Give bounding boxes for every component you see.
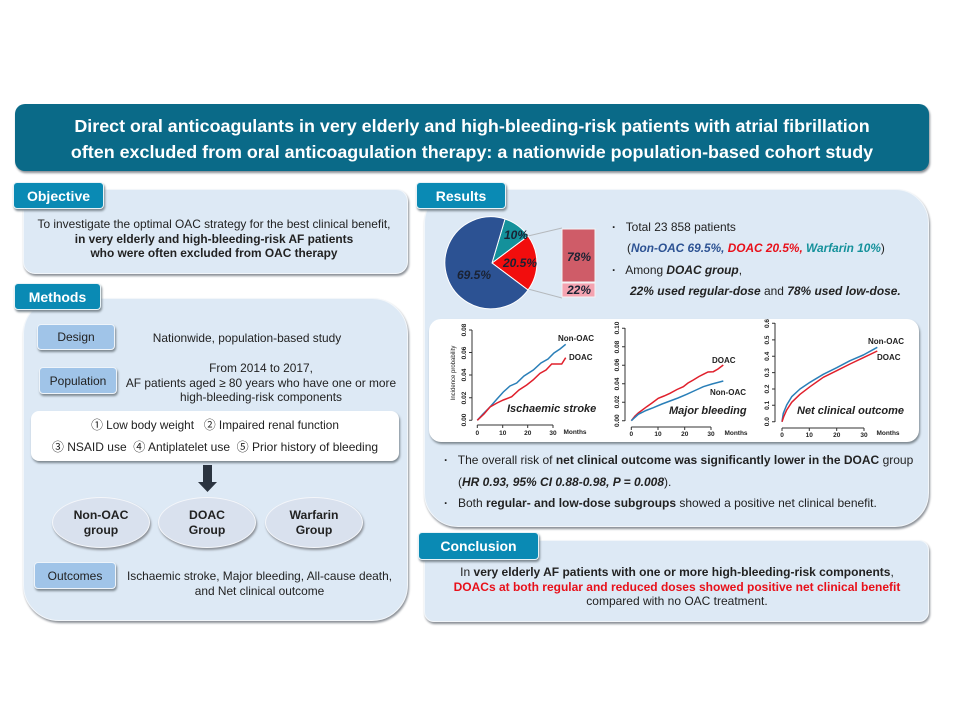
group: warfarin: Group [296, 522, 332, 536]
conclusion text: In very elderly AF patients with one or more high-bleeding-risk components, [460, 565, 894, 579]
chart: net clinical outcome: 10 [806, 432, 813, 439]
chart: net clinical outcome: Net clinical outcome [797, 405, 904, 417]
chart: ischaemic stroke: Months [563, 429, 587, 436]
patient shares: (Non-OAC 69.5%, DOAC 20.5%, Warfarin 10%) [627, 241, 885, 255]
chart: major bleeding [614, 321, 748, 438]
heading: methods: Methods [29, 288, 86, 304]
label: population: Population [50, 374, 106, 388]
bullet: subgroups: · Both regular- and low-dose subgroups showed a positive net clinical benefit. [444, 496, 877, 510]
chart: ischaemic stroke: Non-OAC [558, 334, 594, 343]
group: non-OAC [52, 497, 150, 548]
results summary text [612, 220, 901, 298]
title banner: often excluded from oral anticoagulation therapy: a nationwide population-based cohort study [71, 142, 873, 162]
objective text: To investigate the optimal OAC strategy for the best clinical benefit, [38, 217, 390, 231]
objective text: in very elderly and high-bleeding-risk AF patients [75, 232, 353, 246]
population text: From 2014 to 2017, [209, 361, 313, 375]
panel: objective [23, 189, 408, 274]
chart: ischaemic stroke: 0.08 [461, 323, 468, 336]
chart: major bleeding: DOAC [712, 356, 736, 365]
chart: net clinical outcome: 20 [833, 432, 841, 439]
population text: AF patients aged ≥ 80 years who have one or more [126, 376, 396, 390]
chart: major bleeding: Months [724, 430, 748, 437]
outcomes text [127, 569, 392, 598]
bullet: DOAC group: · Among DOAC group, [612, 263, 742, 277]
chart: net clinical outcome: 0.5 [764, 335, 771, 345]
label: design [37, 324, 115, 350]
chart: major bleeding: 0.10 [614, 321, 621, 334]
group: warfarin: Warfarin [290, 508, 338, 522]
chart panel [429, 319, 919, 442]
chart: ischaemic stroke: 0.00 [461, 413, 468, 426]
chart: major bleeding: 0.06 [614, 358, 621, 371]
label: outcomes: Outcomes [48, 568, 102, 582]
chart: ischaemic stroke: 30 [549, 430, 557, 437]
components row 2: ③ NSAID use ④ Antiplatelet use ⑤ Prior history of bleeding [52, 440, 378, 454]
chart: major bleeding: Non-OAC [710, 388, 746, 397]
outcomes text: and Net clinical outcome [195, 584, 324, 598]
chart: ischaemic stroke: 10 [499, 430, 507, 437]
group: DOAC: Group [189, 522, 225, 536]
chart: ischaemic stroke: Incidence probability [451, 346, 457, 400]
outcomes text: Ischaemic stroke, Major bleeding, All-cause death, [127, 569, 392, 583]
chart: major bleeding: 0 [629, 431, 633, 438]
bullet: net clinical outcome: · The overall risk of net clinical outcome was significantly lower in the DOAC group [444, 453, 913, 467]
chart: net clinical outcome: 30 [860, 432, 868, 439]
pie chart with DOAC breakdown: 20.5% [502, 256, 537, 270]
design text: Nationwide, population-based study [153, 331, 341, 345]
chart: ischaemic stroke: Ischaemic stroke [507, 403, 596, 415]
heading: objective [13, 182, 104, 209]
bullet: total: · Total 23 858 patients [612, 220, 736, 234]
group: non-OAC: group [84, 522, 118, 536]
conclusion text: DOACs at both regular and reduced doses showed positive net clinical benefit [454, 580, 900, 594]
results findings text [444, 453, 913, 510]
chart: net clinical outcome: 0.0 [764, 417, 771, 426]
objective text [38, 217, 390, 260]
chart: ischaemic stroke: 0 [475, 430, 479, 437]
group: DOAC: DOAC [189, 508, 225, 522]
chart: major bleeding: 20 [681, 431, 689, 438]
label: outcomes [34, 562, 116, 589]
chart: net clinical outcome: 0.6 [764, 319, 771, 328]
chart: net clinical outcome: 0.1 [764, 400, 771, 410]
chart: ischaemic stroke: 0.02 [461, 391, 468, 404]
group: DOAC [158, 497, 256, 548]
chart: net clinical outcome: 0.2 [764, 384, 771, 394]
chart: major bleeding: 0.08 [614, 340, 621, 353]
chart: ischaemic stroke: DOAC [569, 353, 593, 362]
dose split: 22% used regular-dose and 78% used low-dose. [630, 284, 901, 298]
heading: conclusion: Conclusion [440, 538, 517, 554]
panel: conclusion [424, 540, 929, 622]
high-bleeding-risk components box [31, 411, 399, 461]
conclusion text: compared with no OAC treatment. [586, 594, 768, 608]
chart: ischaemic stroke: 0.06 [461, 346, 468, 359]
heading: objective: Objective [27, 188, 90, 204]
chart: major bleeding: 0.04 [614, 377, 621, 390]
chart: net clinical outcome: 0.4 [764, 351, 771, 361]
title banner [15, 104, 929, 171]
label: design: Design [57, 330, 95, 344]
pie chart with DOAC breakdown: 78% [567, 250, 591, 264]
hazard ratio: (HR 0.93, 95% CI 0.88-0.98, P = 0.008). [458, 475, 671, 489]
group: non-OAC: Non-OAC [74, 508, 128, 522]
chart: major bleeding: 30 [707, 431, 715, 438]
conclusion text [454, 565, 900, 608]
objective text: who were often excluded from OAC therapy [90, 246, 338, 260]
chart: major bleeding: Major bleeding [669, 405, 747, 417]
chart: net clinical outcome: 0.3 [764, 368, 771, 377]
panel: methods [23, 298, 408, 621]
heading: results: Results [436, 188, 486, 204]
title banner: Direct oral anticoagulants in very elderly and high-bleeding-risk patients with atrial fibrillation [74, 116, 870, 136]
chart: major bleeding: 10 [654, 431, 662, 438]
components row 1: ① Low body weight ② Impaired renal function [91, 418, 339, 432]
pie chart with DOAC breakdown: 69.5% [457, 268, 491, 282]
chart: net clinical outcome: 0 [780, 432, 784, 439]
heading: methods [14, 283, 101, 310]
panel: results [424, 189, 929, 527]
population text: high-bleeding-risk components [180, 390, 342, 404]
chart: net clinical outcome: DOAC [877, 353, 901, 362]
pie chart with DOAC breakdown: 22% [566, 283, 591, 297]
label: population [39, 367, 117, 394]
chart: ischaemic stroke: 0.04 [461, 368, 468, 381]
pie chart with DOAC breakdown: 10% [504, 228, 528, 242]
chart: major bleeding: 0.02 [614, 395, 621, 408]
chart: major bleeding: 0.00 [614, 414, 621, 427]
heading: conclusion [418, 532, 539, 560]
chart: net clinical outcome [764, 319, 904, 439]
chart: ischaemic stroke: 20 [524, 430, 532, 437]
heading: results [416, 182, 506, 209]
chart: ischaemic stroke [451, 323, 596, 437]
population text [126, 361, 396, 404]
chart: net clinical outcome: Non-OAC [868, 337, 904, 346]
chart: net clinical outcome: Months [876, 430, 900, 437]
group: warfarin [265, 497, 363, 548]
